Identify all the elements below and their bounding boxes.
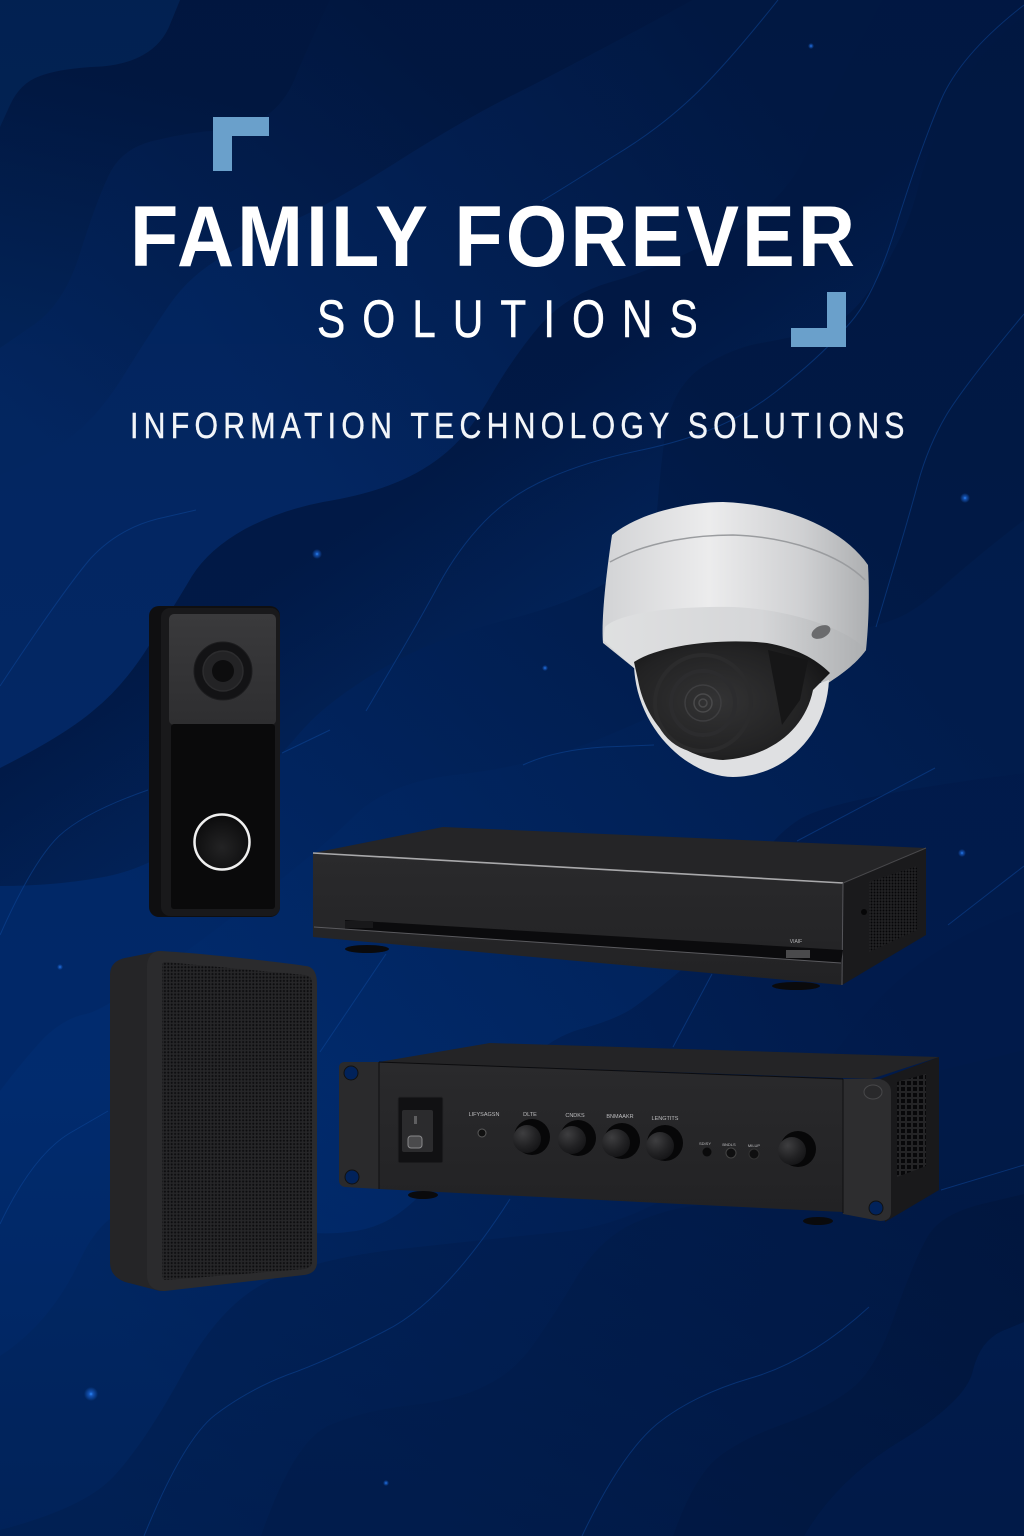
amplifier small labels: BNMAAKR — [606, 1114, 634, 1120]
doorbell button ring — [194, 814, 250, 870]
recorder small label: VIAIF — [790, 939, 802, 945]
amplifier small labels: CNDKS — [565, 1113, 585, 1119]
device: rack amplifier — [339, 1043, 939, 1225]
doorbell lens — [194, 642, 252, 700]
amplifier power switch — [398, 1097, 443, 1163]
amplifier small labels: LENGTITS — [652, 1116, 679, 1122]
amplifier small labels: LIFYSAGSN — [469, 1112, 499, 1118]
amplifier small labels: DLTE — [523, 1112, 537, 1118]
amplifier small labels: MILUP — [748, 1143, 760, 1148]
amplifier front panel — [379, 1062, 843, 1212]
device: wall speaker — [110, 951, 317, 1291]
speaker grille — [162, 962, 312, 1280]
amplifier knob faces — [513, 1125, 806, 1165]
device: network video recorder box — [313, 827, 926, 990]
logo corner bracket: bottom right — [791, 292, 846, 347]
device: dome security camera — [603, 502, 869, 777]
amplifier small labels: BNDLS — [722, 1142, 736, 1147]
tagline: INFORMATION TECHNOLOGY SOLUTIONS — [130, 407, 904, 447]
amplifier small labels: SDISY — [699, 1141, 711, 1146]
amplifier left rack ear — [339, 1062, 379, 1189]
device: video doorbell — [149, 606, 280, 917]
amplifier small labels — [469, 1112, 760, 1148]
title: Family Forever: FAMILY FOREVER — [130, 188, 855, 285]
amplifier right rack ear — [843, 1079, 891, 1221]
amplifier knob bodies — [514, 1119, 816, 1167]
logo corner bracket: top left — [213, 117, 269, 171]
subtitle: Solutions: SOLUTIONS — [317, 291, 698, 349]
